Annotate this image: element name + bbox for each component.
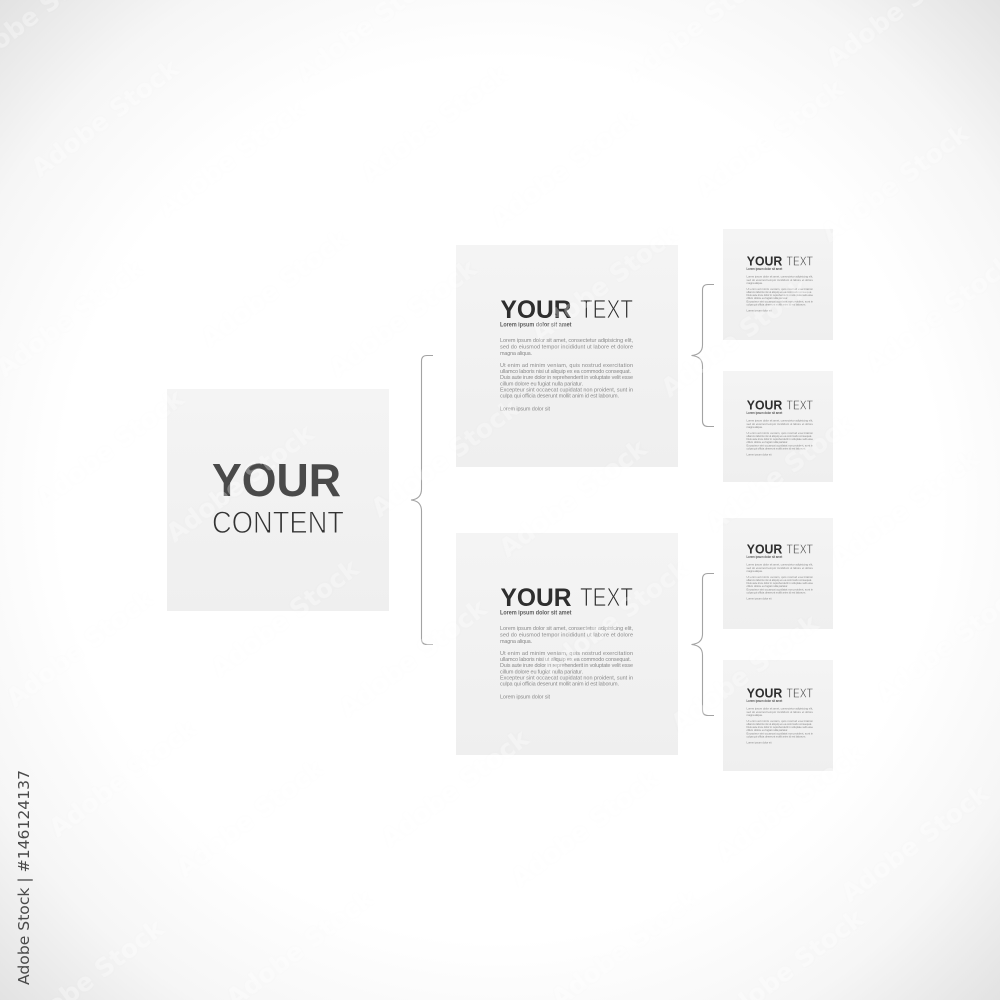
panel: small box 3 bbox=[723, 518, 833, 629]
panel: upper middle box: Lorem ipsum dolor sit bbox=[500, 406, 550, 412]
panel: lower middle box: sed do eiusmod tempor incididunt ut labore et dolore bbox=[500, 632, 633, 638]
panel: small box 1: ullamco laboris nisi ut aliquip ex ea commodo consequat. bbox=[746, 290, 812, 294]
panel: small box 3: cillum dolore eu fugiat nulla pariatur. bbox=[746, 584, 788, 588]
panel: small box 1: Lorem ipsum dolor sit bbox=[746, 309, 772, 313]
watermark pattern: Adobe Stock bbox=[196, 223, 355, 353]
watermark pattern: Adobe Stock bbox=[153, 93, 312, 223]
panel: small box 4: culpa qui officia deserunt mollit anim id est laborum. bbox=[746, 734, 806, 738]
watermark pattern: Adobe Stock bbox=[526, 218, 685, 348]
panel: small box 4: TEXT bbox=[786, 686, 813, 700]
watermark pattern: Adobe Stock bbox=[486, 103, 645, 233]
stock id label: Adobe Stock | #146124137 bbox=[15, 770, 33, 985]
panel: small box 3: ullamco laboris nisi ut aliquip ex ea commodo consequat. bbox=[746, 578, 812, 582]
panel: small box 2: Lorem ipsum dolor sit amet, consectetur adipisicing elit, bbox=[746, 418, 813, 422]
panel: lower middle box bbox=[456, 533, 678, 755]
watermark pattern: Adobe Stock bbox=[376, 723, 535, 853]
bracket: lower small boxes bbox=[692, 574, 714, 716]
panel: small box 3: Lorem ipsum dolor sit amet, consectetur adipisicing elit, bbox=[746, 562, 813, 566]
panel: small box 4: Excepteur sint occaecat cupidatat non proident, sunt in bbox=[746, 731, 813, 735]
panel: small box 2: TEXT bbox=[786, 398, 813, 412]
panel: small box 3: Ut enim ad minim veniam, quis nostrud exercitation bbox=[746, 575, 813, 579]
panel: small box 1: TEXT bbox=[786, 254, 813, 268]
watermark pattern: Adobe Stock bbox=[161, 418, 320, 548]
bracket: main to middle boxes bbox=[411, 356, 433, 644]
panel: small box 3: Lorem ipsum dolor sit amet bbox=[746, 555, 783, 559]
bracket: upper small boxes bbox=[692, 284, 714, 426]
panel: lower middle box: TEXT bbox=[580, 582, 633, 612]
watermark pattern: Adobe Stock bbox=[506, 763, 665, 893]
panel: small box 4: Ut enim ad minim veniam, quis nostrud exercitation bbox=[746, 719, 813, 723]
panel: small box 3: YOUR bbox=[747, 542, 782, 556]
watermark pattern: Adobe Stock bbox=[356, 58, 515, 188]
panel: upper middle box: Excepteur sint occaecat cupidatat non proident, sunt in bbox=[500, 388, 633, 394]
panel: small box 2: Ut enim ad minim veniam, quis nostrud exercitation bbox=[746, 431, 813, 435]
panel: small box 1: sed do eiusmod tempor incididunt ut labore et dolore bbox=[746, 278, 813, 282]
panel: small box 4: sed do eiusmod tempor incididunt ut labore et dolore bbox=[746, 710, 813, 714]
watermark pattern: Adobe Stock bbox=[711, 738, 870, 868]
panel: small box 3: Duis aute irure dolor in reprehenderit in voluptate velit esse bbox=[746, 581, 813, 585]
watermark pattern: Adobe Stock bbox=[816, 118, 975, 248]
panel: small box 1 bbox=[723, 229, 833, 340]
panel: small box 4: YOUR bbox=[747, 686, 782, 700]
watermark pattern: Adobe Stock bbox=[206, 553, 365, 683]
watermark pattern: Adobe Stock bbox=[494, 433, 653, 563]
panel: upper middle box: Lorem ipsum dolor sit amet, consectetur adipisicing elit, bbox=[500, 338, 633, 344]
watermark pattern: Adobe Stock bbox=[666, 608, 825, 738]
panel: upper middle box: TEXT bbox=[580, 294, 633, 324]
panel: small box 1: cillum dolore eu fugiat nulla pariatur. bbox=[746, 296, 788, 300]
panel: upper middle box: Duis aute irure dolor in reprehenderit in voluptate velit esse bbox=[500, 375, 633, 381]
panel: small box 4: Duis aute irure dolor in reprehenderit in voluptate velit esse bbox=[746, 725, 813, 729]
watermark pattern: Adobe Stock bbox=[536, 553, 695, 683]
panel: upper middle box: culpa qui officia deserunt mollit anim id est laborum. bbox=[500, 394, 619, 400]
heading: CONTENT: CONTENT bbox=[212, 504, 344, 540]
panel: small box 4 bbox=[723, 660, 833, 771]
panel: small box 2: Excepteur sint occaecat cupidatat non proident, sunt in bbox=[746, 443, 813, 447]
panel: upper middle box bbox=[456, 245, 678, 467]
panel: small box 2: culpa qui officia deserunt mollit anim id est laborum. bbox=[746, 446, 806, 450]
panel: small box 2: Lorem ipsum dolor sit amet bbox=[746, 411, 783, 415]
watermark pattern: Adobe Stock bbox=[1, 583, 160, 713]
panel: lower middle box: culpa qui officia deserunt mollit anim id est laborum. bbox=[500, 682, 619, 688]
panel: small box 4: Lorem ipsum dolor sit bbox=[746, 741, 772, 745]
panel: small box 4: Lorem ipsum dolor sit amet bbox=[746, 699, 783, 703]
panel: lower middle box: Lorem ipsum dolor sit amet, consectetur adipisicing elit, bbox=[500, 626, 633, 632]
panel: small box 3: TEXT bbox=[786, 542, 813, 556]
panel: small box 2: ullamco laboris nisi ut aliquip ex ea commodo consequat. bbox=[746, 434, 812, 438]
panel: small box 1: Lorem ipsum dolor sit amet, consectetur adipisicing elit, bbox=[746, 274, 813, 278]
watermark pattern: Adobe Stock bbox=[656, 273, 815, 403]
panel: lower middle box: Excepteur sint occaecat cupidatat non proident, sunt in bbox=[500, 676, 633, 682]
panel: small box 2: Lorem ipsum dolor sit bbox=[746, 453, 772, 457]
watermark pattern: Adobe Stock bbox=[26, 53, 185, 183]
panel: small box 1: Excepteur sint occaecat cupidatat non proident, sunt in bbox=[746, 299, 813, 303]
panel: small box 1: magna aliqua. bbox=[746, 281, 763, 285]
panel: upper middle box: magna aliqua. bbox=[500, 351, 532, 357]
panel: small box 4: magna aliqua. bbox=[746, 713, 763, 717]
panel: small box 1: Ut enim ad minim veniam, quis nostrud exercitation bbox=[746, 287, 813, 291]
watermark pattern: Adobe Stock bbox=[836, 778, 995, 908]
panel: upper middle box: YOUR bbox=[500, 296, 572, 324]
panel: small box 3: Excepteur sint occaecat cupidatat non proident, sunt in bbox=[746, 587, 813, 591]
panel: lower middle box: Lorem ipsum dolor sit bbox=[500, 694, 550, 700]
watermark pattern: Adobe Stock bbox=[171, 753, 330, 883]
panel: lower middle box: ullamco laboris nisi ut aliquip ex ea commodo consequat. bbox=[500, 657, 631, 663]
panel: upper middle box: ullamco laboris nisi ut aliquip ex ea commodo consequat. bbox=[500, 369, 631, 375]
panel: small box 2: YOUR bbox=[747, 398, 782, 412]
heading: YOUR: YOUR bbox=[212, 454, 341, 506]
panel: lower middle box: magna aliqua. bbox=[500, 639, 532, 645]
panel: lower middle box: Lorem ipsum dolor sit amet bbox=[500, 610, 572, 616]
panel: small box 2 bbox=[723, 371, 833, 482]
watermark pattern: Adobe Stock bbox=[324, 253, 483, 383]
panel: small box 4: Lorem ipsum dolor sit amet, consectetur adipisicing elit, bbox=[746, 706, 813, 710]
watermark pattern: Adobe Stock bbox=[701, 408, 860, 538]
panel: lower middle box: Ut enim ad minim veniam, quis nostrud exercitation bbox=[500, 651, 633, 657]
panel: lower middle box: Duis aute irure dolor in reprehenderit in voluptate velit esse bbox=[500, 663, 633, 669]
panel: lower middle box: cillum dolore eu fugiat nulla pariatur. bbox=[500, 669, 583, 675]
panel: small box 2: magna aliqua. bbox=[746, 425, 763, 429]
panel: small box 3: magna aliqua. bbox=[746, 569, 763, 573]
panel: small box 2: Duis aute irure dolor in reprehenderit in voluptate velit esse bbox=[746, 437, 813, 441]
panel: upper middle box: Lorem ipsum dolor sit amet bbox=[500, 322, 572, 328]
panel: small box 3: sed do eiusmod tempor incididunt ut labore et dolore bbox=[746, 566, 813, 570]
panel: upper middle box: Ut enim ad minim veniam, quis nostrud exercitation bbox=[500, 363, 633, 369]
panel: small box 2: cillum dolore eu fugiat nulla pariatur. bbox=[746, 440, 788, 444]
panel: lower middle box: YOUR bbox=[500, 584, 572, 612]
watermark pattern: Adobe Stock bbox=[691, 73, 850, 203]
panel: small box 4: ullamco laboris nisi ut aliquip ex ea commodo consequat. bbox=[746, 722, 812, 726]
watermark pattern: Adobe Stock bbox=[826, 443, 985, 573]
panel: main content box bbox=[167, 389, 389, 611]
panel: small box 3: Lorem ipsum dolor sit bbox=[746, 597, 772, 601]
watermark pattern: Adobe Stock bbox=[334, 593, 493, 723]
panel: upper middle box: cillum dolore eu fugiat nulla pariatur. bbox=[500, 381, 583, 387]
panel: small box 1: Duis aute irure dolor in reprehenderit in voluptate velit esse bbox=[746, 293, 813, 297]
panel: small box 1: YOUR bbox=[747, 254, 782, 268]
panel: small box 1: Lorem ipsum dolor sit amet bbox=[746, 267, 783, 271]
watermark pattern: Adobe Stock bbox=[31, 383, 190, 513]
panel: small box 2: sed do eiusmod tempor incididunt ut labore et dolore bbox=[746, 422, 813, 426]
watermark pattern: Adobe Stock bbox=[44, 713, 203, 843]
watermark pattern: Adobe Stock bbox=[366, 393, 525, 523]
panel: small box 4: cillum dolore eu fugiat nulla pariatur. bbox=[746, 728, 788, 732]
panel: small box 1: culpa qui officia deserunt mollit anim id est laborum. bbox=[746, 302, 806, 306]
panel: small box 3: culpa qui officia deserunt mollit anim id est laborum. bbox=[746, 590, 806, 594]
panel: upper middle box: sed do eiusmod tempor incididunt ut labore et dolore bbox=[500, 344, 633, 350]
